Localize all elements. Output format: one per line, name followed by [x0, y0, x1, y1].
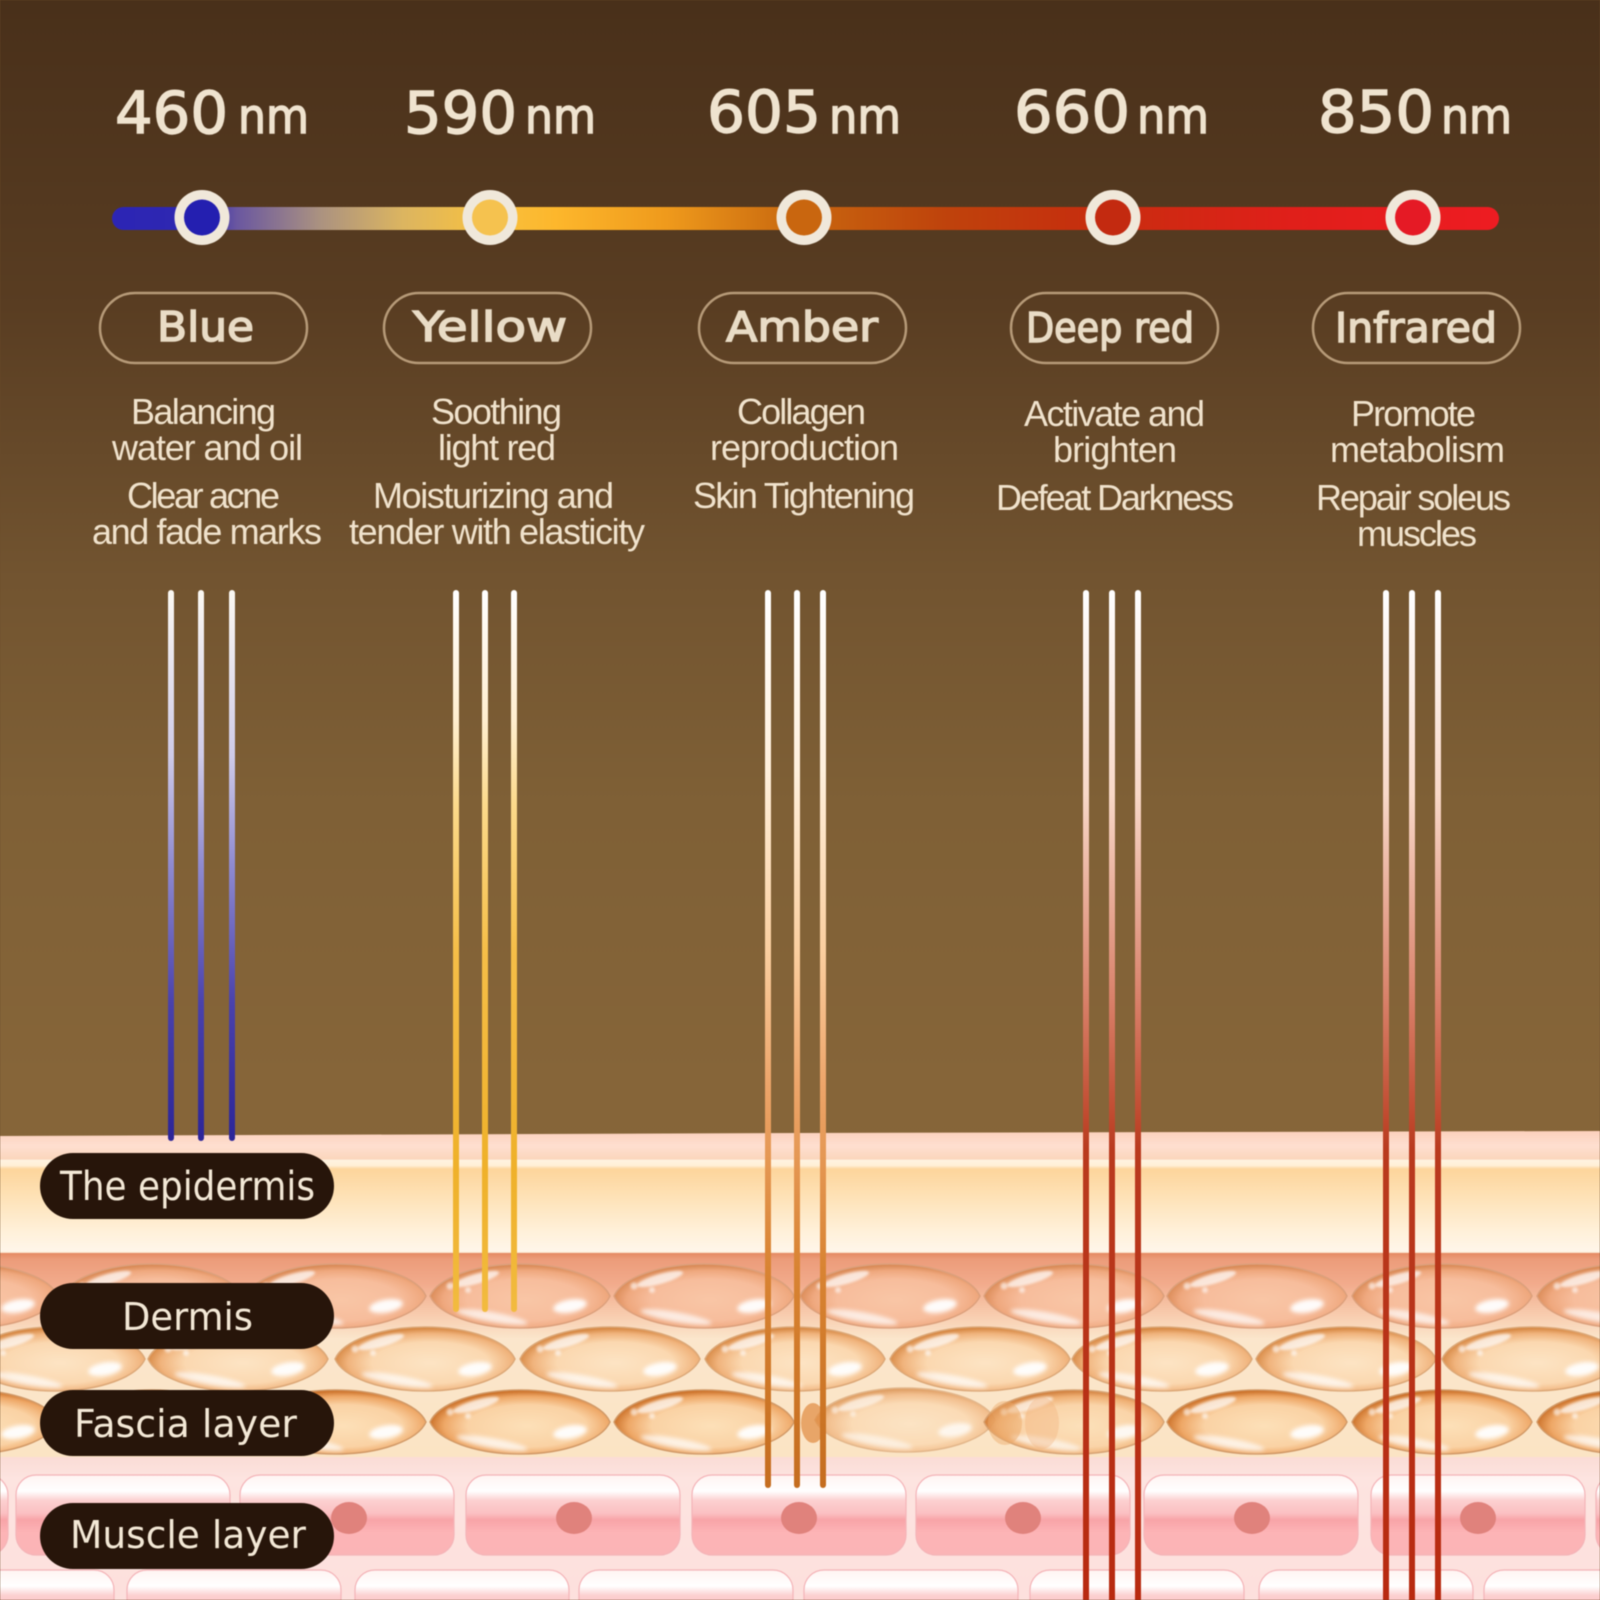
text: amber benefits: reproduction	[710, 427, 899, 468]
text: infrared benefits: Promote	[1351, 393, 1476, 434]
pill: Amber	[699, 293, 906, 363]
light rays: infrared	[1383, 590, 1441, 1600]
illustration: skin cross-section	[0, 1131, 1600, 1600]
pill: Yellow	[384, 293, 591, 363]
layer: muscle cells	[0, 1457, 1600, 1600]
label: Dermis	[40, 1283, 334, 1349]
460nm: nm	[238, 89, 309, 145]
layer: dermis and fascia fat cells	[0, 1253, 1600, 1458]
skin layer labels	[40, 1153, 334, 1569]
layer: epidermis	[0, 1131, 1600, 1254]
text: amber benefits: Collagen	[737, 391, 866, 432]
wavelength spectrum slider	[112, 190, 1499, 245]
460nm	[115, 79, 309, 147]
text: deep red benefits: brighten	[1053, 429, 1177, 470]
850nm	[1318, 78, 1512, 146]
pill: Blue	[100, 293, 307, 363]
label: Dermis: Dermis	[122, 1295, 253, 1339]
850nm: nm	[1441, 89, 1512, 145]
pill: Deep red	[1011, 293, 1218, 363]
text: amber benefits	[693, 391, 915, 516]
marker: blue	[174, 190, 230, 245]
label: Fascia layer: Fascia layer	[74, 1402, 297, 1446]
660nm: 660	[1014, 78, 1130, 146]
pill: Infrared	[1313, 293, 1520, 363]
light rays: yellow	[453, 590, 517, 1312]
pill: Deep red: Deep red	[1026, 304, 1194, 352]
text: infrared benefits: muscles	[1357, 513, 1477, 554]
light rays: blue	[168, 590, 235, 1141]
660nm: nm	[1137, 89, 1209, 145]
pill: Amber: Amber	[726, 303, 878, 351]
text: blue benefits: Balancing	[131, 391, 276, 432]
590nm: nm	[525, 89, 596, 145]
660nm	[1014, 78, 1209, 146]
label: The epidermis	[40, 1153, 334, 1219]
label: Muscle layer: Muscle layer	[70, 1513, 306, 1557]
wavelength labels	[115, 78, 1512, 147]
text: yellow benefits: tender with elasticity	[349, 511, 645, 552]
text: blue benefits: water and oil	[111, 427, 303, 468]
text: infrared benefits: metabolism	[1330, 429, 1505, 470]
marker: deep red	[1086, 190, 1140, 245]
label: The epidermis: The epidermis	[59, 1164, 315, 1210]
text: yellow benefits: Soothing	[431, 391, 562, 432]
605nm: 605	[707, 78, 821, 146]
pill: Infrared: Infrared	[1335, 304, 1497, 352]
text: yellow benefits: Moisturizing and	[373, 475, 614, 516]
text: blue benefits: Clear acne	[127, 475, 280, 516]
text: amber benefits: Skin Tightening	[693, 475, 915, 516]
text: deep red benefits	[996, 393, 1234, 518]
marker: infrared	[1386, 190, 1440, 245]
605nm	[707, 78, 901, 146]
label: Fascia layer	[40, 1390, 334, 1456]
850nm: 850	[1318, 78, 1434, 146]
pill: Yellow: Yellow	[412, 303, 567, 351]
text: deep red benefits: Activate and	[1024, 393, 1205, 434]
light rays: amber	[765, 590, 826, 1488]
text: yellow benefits: light red	[438, 427, 556, 468]
text: infrared benefits	[1316, 393, 1511, 554]
text: infrared benefits: Repair soleus	[1316, 477, 1511, 518]
590nm: 590	[404, 79, 517, 147]
pill: Blue: Blue	[157, 303, 254, 351]
605nm: nm	[829, 89, 901, 145]
text: deep red benefits: Defeat Darkness	[996, 477, 1234, 518]
text: yellow benefits	[349, 391, 645, 552]
colour name pills	[100, 293, 1520, 363]
text: blue benefits: and fade marks	[92, 511, 322, 552]
590nm	[404, 79, 596, 147]
light rays: deep red	[1083, 590, 1141, 1600]
marker: yellow	[462, 190, 518, 245]
label: Muscle layer	[40, 1503, 334, 1569]
text: blue benefits	[92, 391, 322, 552]
460nm: 460	[115, 79, 228, 147]
marker: amber	[776, 190, 832, 245]
